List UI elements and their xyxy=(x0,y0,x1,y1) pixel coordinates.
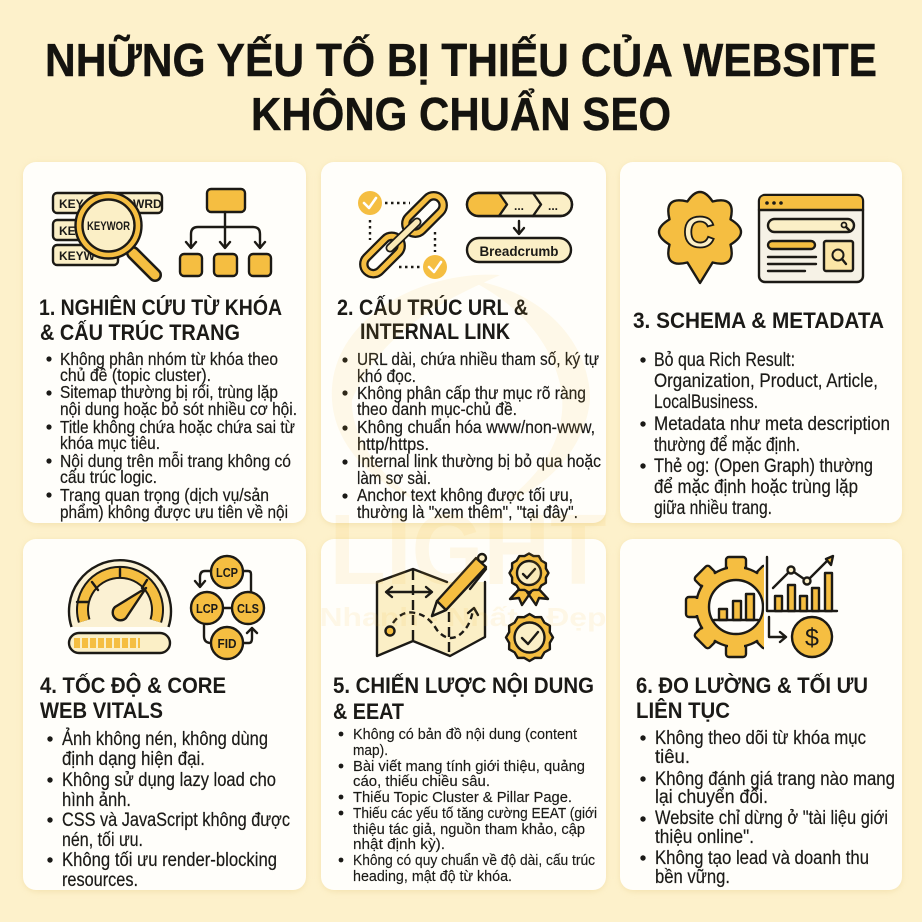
bullet list: Nội dung trên mỗi trang không có xyxy=(60,450,291,471)
heading xyxy=(40,672,226,723)
icon: core web vitals cycle: FID xyxy=(218,636,236,651)
bullet list: thiệu online". xyxy=(655,827,754,848)
panel: 3 schema and metadata xyxy=(620,162,902,523)
bullet list: Thiếu Topic Cluster & Pillar Page. xyxy=(353,789,572,806)
bullet list: Sitemap thường bị rối, trùng lặp xyxy=(60,382,278,402)
watermark: LIGHT logo: LIGHT xyxy=(330,494,606,606)
icon: breadcrumb: Breadcrumb xyxy=(480,243,558,259)
bullet list: Title không chứa hoặc chứa sai từ xyxy=(60,417,295,437)
icon: dollar coin xyxy=(769,617,832,657)
bullet list: để mặc định hoặc trùng lặp xyxy=(654,477,858,498)
icon: core web vitals cycle: CLS xyxy=(237,601,259,616)
heading: LIÊN TỤC xyxy=(636,698,730,723)
bullet list: khó đọc. xyxy=(357,366,416,386)
icon: breadcrumb xyxy=(467,193,572,262)
heading: 4. TỐC ĐỘ & CORE xyxy=(40,672,226,698)
icon: keywords and magnifier: KEYWOR xyxy=(87,219,130,233)
bullet list: Không có bản đồ nội dung (content xyxy=(353,726,578,743)
heading xyxy=(337,295,528,344)
bullet list: URL dài, chứa nhiều tham số, ký tự xyxy=(357,349,599,369)
heading: & EEAT xyxy=(333,699,404,724)
bullet list xyxy=(47,728,290,891)
heading: & CẤU TRÚC TRANG xyxy=(40,320,240,345)
bullet list: hình ảnh. xyxy=(62,790,131,811)
bullet list: định dạng hiện đại. xyxy=(62,749,205,770)
icon: gear with bars xyxy=(686,552,790,662)
bullet list: cấu trúc logic. xyxy=(60,467,157,487)
bullet list: Bỏ qua Rich Result: xyxy=(654,350,795,371)
icon: keywords and magnifier xyxy=(53,192,162,275)
icon: keywords and magnifier: KEYW xyxy=(59,249,96,263)
bullet list: Không sử dụng lazy load cho xyxy=(62,770,276,791)
panel: 5 content strategy and EEAT xyxy=(321,539,606,890)
bullet list: theo danh mục-chủ đề. xyxy=(357,399,517,419)
bullet list: thường để mặc định. xyxy=(654,435,800,456)
icon: core web vitals cycle: LCP xyxy=(216,565,238,580)
bullet list: Website chỉ dừng ở "tài liệu giới xyxy=(655,808,888,829)
bullet list: Ảnh không nén, không dùng xyxy=(62,728,268,750)
bullet list: LocalBusiness. xyxy=(654,392,758,413)
bullet list: bền vững. xyxy=(655,867,730,888)
bullet list: CSS và JavaScript không được xyxy=(62,810,290,831)
bullet list: Không có quy chuẩn về độ dài, cấu trúc xyxy=(353,852,595,869)
bullet list: http/https. xyxy=(357,434,429,454)
bullet list: Không tạo lead và doanh thu xyxy=(655,848,869,869)
icon: core web vitals cycle xyxy=(191,556,264,659)
bullet list: lại chuyển đổi. xyxy=(655,787,768,808)
bullet list: Thẻ og: (Open Graph) thường xyxy=(654,456,873,477)
icon: breadcrumb: ... xyxy=(548,199,558,213)
title xyxy=(45,34,877,140)
icon: keywords and magnifier: KEY xyxy=(59,197,84,211)
bullet list: Trang quan trọng (dịch vụ/sản xyxy=(60,485,269,505)
panel: 4 speed and core web vitals xyxy=(23,539,306,891)
bullet list: Internal link thường bị bỏ qua hoặc xyxy=(357,451,601,471)
icon: browser window xyxy=(759,195,863,282)
bullet list: map). xyxy=(353,742,388,759)
bullet list: Metadata như meta description xyxy=(654,414,890,435)
heading: WEB VITALS xyxy=(40,698,163,723)
bullet list: nhật định kỳ). xyxy=(353,836,445,853)
bullet list: làm sơ sài. xyxy=(357,468,431,488)
bullet list: thường là "xem thêm", "tại đây". xyxy=(357,502,578,522)
watermark: LIGHT logo xyxy=(320,275,606,632)
bullet list: Không theo dõi từ khóa mục xyxy=(655,728,866,749)
bullet list xyxy=(640,728,895,888)
bullet list xyxy=(46,349,297,522)
bullet list: Không đánh giá trang nào mang xyxy=(655,769,895,790)
bullet list: Không phân cấp thư mục rõ ràng xyxy=(357,383,586,403)
bullet list: giữa nhiều trang. xyxy=(654,498,772,519)
icon: breadcrumb: ... xyxy=(514,199,524,213)
bullet list: Anchor text không được tối ưu, xyxy=(357,485,573,505)
icon: keywords and magnifier: KE xyxy=(59,224,76,238)
bullet list: heading, mật độ từ khóa. xyxy=(353,868,512,885)
icon: speed gauge xyxy=(69,560,171,653)
bullet list: resources. xyxy=(62,870,138,891)
bullet list: khóa mục tiêu. xyxy=(60,433,160,453)
bullet list: chủ đề (topic cluster). xyxy=(60,365,211,385)
bullet list: Thiếu các yếu tố tăng cường EEAT (giới xyxy=(353,805,597,822)
heading: 6. ĐO LƯỜNG & TỐI ƯU xyxy=(636,672,868,698)
bullet list xyxy=(342,349,601,522)
heading: 5. CHIẾN LƯỢC NỘI DUNG xyxy=(333,673,594,698)
heading xyxy=(333,673,594,724)
heading: 3. SCHEMA & METADATA xyxy=(633,308,884,333)
icon: keywords and magnifier: WRD xyxy=(133,197,162,211)
bullet list xyxy=(640,350,890,519)
bullet list: Không chuẩn hóa www/non-www, xyxy=(357,417,595,437)
heading xyxy=(39,295,282,345)
title: NHỮNG YẾU TỐ BỊ THIẾU CỦA WEBSITE xyxy=(45,34,877,86)
icon: growth chart xyxy=(767,556,837,611)
icon: core web vitals cycle: LCP xyxy=(196,601,218,616)
heading: INTERNAL LINK xyxy=(360,319,511,344)
bullet list: Organization, Product, Article, xyxy=(654,371,878,392)
icon: schema badge: C xyxy=(683,208,715,257)
icon: map and pencil xyxy=(377,554,486,656)
watermark: LIGHT logo: Nhanh - Nhất - Đẹp xyxy=(320,602,606,632)
title: KHÔNG CHUẨN SEO xyxy=(251,88,671,140)
heading xyxy=(636,672,868,723)
bullet list xyxy=(339,726,597,885)
bullet list: Bài viết mang tính giới thiệu, quảng xyxy=(353,758,585,775)
bullet list: tiêu. xyxy=(655,747,690,768)
bullet list: phẩm) không được ưu tiên về nội xyxy=(60,502,288,522)
icon: dollar coin: $ xyxy=(805,624,819,652)
panel: 2 URL structure xyxy=(321,162,606,523)
heading: 2. CẤU TRÚC URL & xyxy=(337,295,528,320)
bullet list: cáo, thiếu chiều sâu. xyxy=(353,773,490,790)
bullet list: Không tối ưu render-blocking xyxy=(62,850,277,871)
bullet list: nội dung hoặc bỏ sót nhiều cơ hội. xyxy=(60,399,297,419)
panel: 6 measurement and optimisation xyxy=(620,539,902,890)
icon: chain link xyxy=(358,191,447,279)
icon: award ribbon badge xyxy=(510,554,548,605)
heading: 1. NGHIÊN CỨU TỪ KHÓA xyxy=(39,295,282,320)
bullet list: thiệu tác giả, nguồn tham khảo, cập xyxy=(353,821,585,838)
panel: 1 keyword research xyxy=(23,162,306,523)
icon: quality seal badge xyxy=(506,614,553,661)
bullet list: nén, tối ưu. xyxy=(62,830,143,851)
bullet list: Không phân nhóm từ khóa theo xyxy=(60,349,278,369)
icon: site hierarchy xyxy=(180,189,271,276)
icon: schema badge xyxy=(659,192,741,283)
